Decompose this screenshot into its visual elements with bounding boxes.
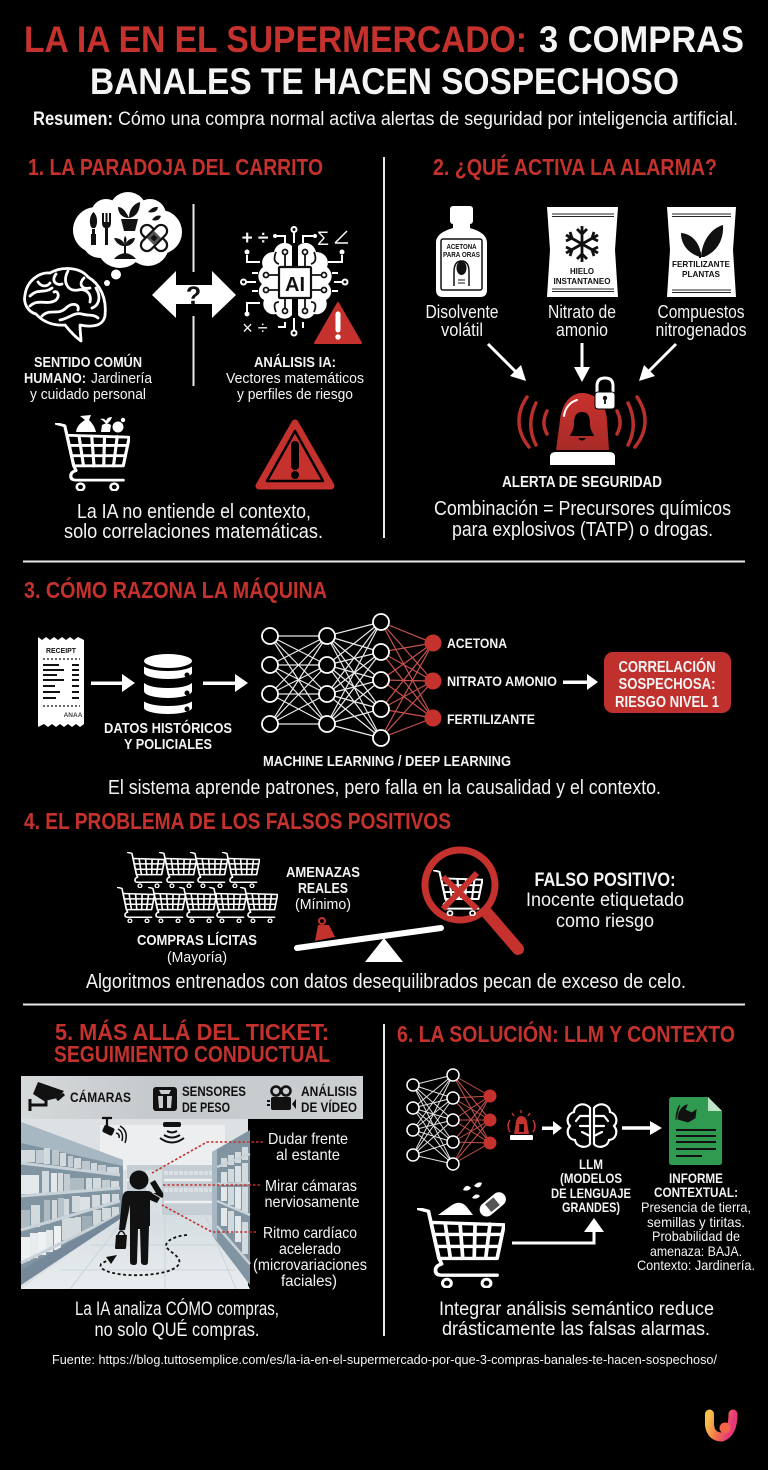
icon: LLM brain [568,1104,616,1147]
text: sentido comun humano: Jardinería [91,370,153,387]
icon: receipt: ANAA [64,712,83,719]
dotted callout lines [152,1142,263,1232]
label: LLM: LLM [579,1156,603,1172]
label: sensores de peso: DE PESO [182,1099,230,1115]
panel: 1 la paradoja del carrito [24,154,364,543]
illustration: supermarket aisle [21,1076,363,1289]
caption 5: no solo QUÉ compras. [94,1320,260,1341]
icon: receipt [38,637,84,727]
label: datos historicos: DATOS HISTÓRICOS [104,719,232,737]
icon: group of carts [118,852,278,923]
labels: behaviours: faciales) [281,1273,337,1290]
label: LLM: (MODELOS [560,1170,622,1186]
callout: correlacion sospechosa: RIESGO NIVEL 1 [615,694,719,711]
icon: thought cloud [73,192,182,286]
arrow [203,674,248,692]
title: 3 COMPRAS [539,19,744,60]
label: datos historicos [104,719,232,753]
chart: balance scale [297,918,441,962]
icon: person with bag [115,1170,163,1265]
label: LLM: GRANDES) [562,1199,620,1215]
label: alerta de seguridad: ALERTA DE SEGURIDAD [502,474,662,491]
arrow: double arrow with question mark [152,271,236,318]
icon: instant ice bag: INSTANTANEO [554,276,611,286]
icon: acetone bottle: PARA ORAS [443,252,480,259]
arrow: cart to LLM [512,1222,594,1243]
text: sentido comun humano: SENTIDO COMÚN [34,353,142,371]
labels: chemicals: Disolvente [426,302,498,322]
icon: small siren [508,1110,535,1140]
icon bar: sensors [21,1076,363,1119]
icon: AI brain [241,227,361,343]
heading 5: SEGUIMIENTO CONDUCTUAL [54,1041,330,1067]
text: analisis ia [226,354,364,403]
label: compras licitas [137,932,257,966]
icon: logo [710,1414,733,1437]
icon: fertilizer bag: FERTILIZANTE [672,259,730,269]
labels: chemicals: volátil [441,320,483,340]
label: informe contextual [637,1170,755,1273]
label: LLM: DE LENGUAJE [551,1185,631,1201]
label: amenazas reales: REALES [298,880,348,897]
icon: siren with lock [519,378,645,465]
caption 1: solo correlaciones matemáticas. [64,521,323,543]
panel: 5 seguimiento conductual [21,1018,367,1341]
label: amenazas reales [286,864,360,913]
icon: AI brain: × ÷ [242,318,268,338]
icon: weight scale [153,1087,177,1111]
heading 3: 3. CÓMO RAZONA LA MÁQUINA [24,576,327,603]
callout: falso positivo: Inocente etiquetado [526,890,684,911]
source: Fuente: https://blog.tuttosemplice.com/es/la-ia-en-el-supermercado-por-que-3-compras-banales-te-hacen-sospechoso/ [52,1352,717,1367]
label: analisis de video [301,1083,357,1115]
caption 2: para explosivos (TATP) o drogas. [452,519,713,541]
icon: camera [30,1082,64,1111]
caption 6: Integrar análisis semántico reduce [439,1299,714,1320]
arrow [622,1121,662,1135]
labels: network outputs [447,635,557,727]
arrow: double arrow with question mark: ? [186,282,201,310]
icon: instant ice bag [547,207,618,297]
title [24,19,744,102]
label: informe contextual: CONTEXTUAL: [654,1184,738,1200]
title: BANALES TE HACEN SOSPECHOSO [90,61,679,102]
text: sentido comun humano: y cuidado personal [30,386,146,403]
text: sentido comun humano [24,353,153,403]
icon: fertilizer bag [667,207,736,297]
labels: behaviours: nerviosamente [264,1194,360,1211]
right shelf [212,1130,250,1285]
labels: network outputs: FERTILIZANTE [447,711,535,727]
icon: magnifier with crossed cart [425,850,518,949]
icon: AI brain: Σ [317,229,329,250]
labels: behaviours: (microvariaciones [253,1257,367,1274]
callout: correlacion sospechosa: SOSPECHOSA: [618,676,716,693]
panel: 3 como razona la maquina [24,576,731,799]
icon: AI brain: AI [285,274,305,296]
labels: behaviours [253,1131,367,1290]
label: compras licitas: (Mayoría) [167,949,227,966]
label: compras licitas: COMPRAS LÍCITAS [137,932,257,949]
icon: database [143,653,193,715]
caption 2: Combinación = Precursores químicos [434,498,731,520]
label: informe contextual: Contexto: Jardinería. [637,1257,755,1273]
callout: falso positivo: FALSO POSITIVO: [534,870,676,891]
label: informe contextual: Probabilidad de [652,1228,740,1244]
labels: behaviours: al estante [276,1147,340,1164]
labels: chemicals: amonio [556,320,608,340]
panel: 6 la solucion [397,1020,755,1340]
labels: network outputs: ACETONA [447,635,507,651]
left shelf [21,1122,123,1285]
icon: AI brain: + ÷ [242,228,268,249]
callout: correlacion sospechosa: CORRELACIÓN [618,657,716,676]
path: dotted walk route [101,1235,187,1275]
caption 4: Algoritmos entrenados con datos desequilibrados pecan de exceso de celo. [86,971,686,993]
labels: chemicals [426,302,746,340]
arrow [563,674,598,690]
title: LA IA EN EL SUPERMERCADO: [24,19,527,60]
label: amenazas reales: (Mínimo) [295,896,351,913]
labels: behaviours: acelerado [279,1241,341,1258]
caption 3: El sistema aprende patrones, pero falla en la causalidad y el contexto. [108,777,661,799]
icon: receipt: RECEIPT [46,646,76,655]
summary: Resumen: [33,109,113,130]
label: informe contextual: INFORME [669,1170,723,1186]
text: sentido comun humano: HUMANO: [24,370,86,387]
label: informe contextual: amenaza: BAJA. [650,1243,742,1259]
label: analisis de video: DE VÍDEO [301,1099,357,1115]
label: LLM [551,1156,631,1215]
labels: chemicals: Nitrato de [548,302,616,322]
arrow [91,674,135,692]
label: sensores de peso: SENSORES [182,1083,246,1099]
panel: 2 que activa la alarma [426,153,746,541]
heading 4: 4. EL PROBLEMA DE LOS FALSOS POSITIVOS [24,808,451,834]
icon: fertilizer bag: PLANTAS [682,269,720,279]
labels: chemicals: nitrogenados [656,320,746,340]
caption 6 [439,1299,714,1340]
labels: behaviours: Dudar frente [268,1131,348,1148]
arrow [542,1121,562,1135]
summary: Cómo una compra normal activa alertas de seguridad por inteligencia artificial. [118,109,738,130]
label: sensores de peso [182,1083,246,1115]
text: analisis ia: Vectores matemáticos [226,370,364,387]
label: informe contextual: Presencia de tierra, [641,1199,751,1215]
icon: shopping cart with goods [56,415,129,490]
caption 1 [64,501,323,543]
icon: video camera [267,1086,296,1110]
heading 5 [54,1018,330,1067]
arrows: into alarm [488,343,676,382]
caption 2 [434,498,731,541]
text: analisis ia: ANÁLISIS IA: [254,354,336,371]
icon: acetone bottle: ACETONA [446,244,476,251]
panel: 4 falsos positivos [24,808,686,993]
labels: chemicals: Compuestos [658,302,744,322]
heading 1: 1. LA PARADOJA DEL CARRITO [28,154,323,180]
label: informe contextual: semillas y tiritas. [647,1214,745,1230]
callout: falso positivo: como riesgo [556,911,654,932]
icon bar: sensors: CÁMARAS [70,1089,131,1105]
arrowhead [584,1218,604,1232]
label: analisis de video: ANÁLISIS [301,1083,357,1099]
label: datos historicos: Y POLICIALES [124,736,212,753]
icon: green document [669,1097,722,1165]
label: amenazas reales: AMENAZAS [286,864,360,881]
heading 2: 2. ¿QUÉ ACTIVA LA ALARMA? [433,153,717,180]
callout: correlacion sospechosa [604,652,731,713]
icon: acetone bottle [436,206,487,297]
heading 5: 5. MÁS ALLÁ DEL TICKET: [55,1018,329,1045]
labels: network outputs: NITRATO AMONIO [447,673,557,689]
icon: instant ice bag: HIELO [570,266,594,276]
caption 1: La IA no entiende el contexto, [77,501,311,523]
caption 5 [75,1298,279,1341]
label: machine learning: MACHINE LEARNING / DEEP LEARNING [263,753,511,770]
chart: small neural network [407,1069,496,1170]
icon: warning triangle [259,423,331,486]
chart: neural network [262,614,442,746]
caption 5: La IA analiza CÓMO compras, [75,1298,279,1320]
text: analisis ia: y perfiles de riesgo [237,386,353,403]
icon: cart with soil, seeds, bandage [419,1182,509,1287]
icon: ceiling camera and sensor [102,1118,184,1143]
callout: falso positivo [526,870,684,932]
caption 6: drásticamente las falsas alarmas. [442,1319,710,1340]
labels: behaviours: Ritmo cardíaco [263,1225,357,1242]
icon: human brain [25,268,105,341]
labels: behaviours: Mirar cámaras [265,1178,357,1195]
